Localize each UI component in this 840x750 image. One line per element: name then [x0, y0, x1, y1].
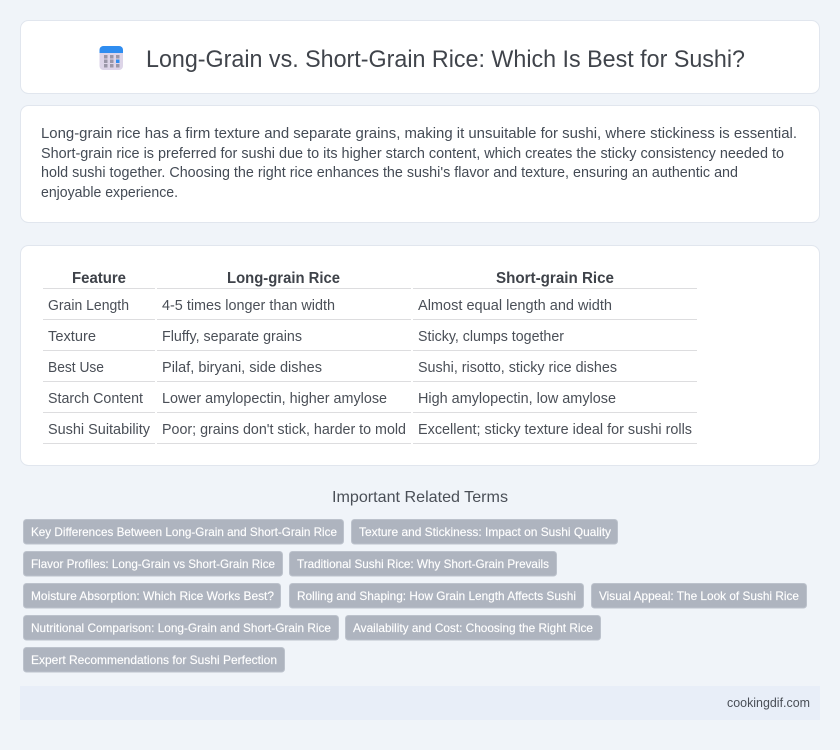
panel: intro text	[20, 106, 820, 222]
tag	[24, 616, 338, 640]
tag: Moisture Absorption: Which Rice Works Best?	[31, 589, 274, 603]
row: texture: Sticky, clumps together	[418, 329, 564, 345]
row: sushi suitability: Poor; grains don't stick, harder to mold	[162, 422, 406, 438]
row: starch content: High amylopectin, low amylose	[418, 391, 616, 407]
tag	[346, 616, 600, 640]
tag: Texture and Stickiness: Impact on Sushi Quality	[359, 525, 611, 539]
row: starch content: Lower amylopectin, higher amylose	[162, 391, 387, 407]
table header	[72, 270, 614, 287]
tag	[592, 584, 806, 608]
tag: Key Differences Between Long-Grain and Short-Grain Rice	[31, 525, 337, 539]
row: best use: Pilaf, biryani, side dishes	[162, 360, 322, 376]
tag: Availability and Cost: Choosing the Right Rice	[353, 621, 593, 635]
row: best use	[48, 360, 617, 376]
row: grain length: Almost equal length and width	[418, 298, 612, 314]
tag: Rolling and Shaping: How Grain Length Affects Sushi	[297, 589, 576, 603]
row: sushi suitability: Sushi Suitability	[48, 422, 151, 438]
tag	[290, 552, 556, 576]
tag: Expert Recommendations for Sushi Perfection	[31, 653, 277, 667]
icon: calendar	[100, 46, 123, 70]
table header: Feature	[72, 270, 126, 287]
row: best use: Sushi, risotto, sticky rice dishes	[418, 360, 617, 376]
row: texture: Fluffy, separate grains	[162, 329, 302, 345]
heading: related terms: Important Related Terms	[332, 489, 508, 506]
panel: comparison table	[20, 246, 820, 466]
tag	[24, 520, 344, 544]
row: sushi suitability	[48, 422, 692, 438]
row: texture	[48, 329, 564, 345]
tag: Visual Appeal: The Look of Sushi Rice	[599, 589, 799, 603]
tag	[290, 584, 584, 608]
tag: Traditional Sushi Rice: Why Short-Grain Prevails	[297, 557, 549, 571]
row: starch content	[48, 391, 616, 407]
footer	[20, 686, 820, 720]
row: best use: Best Use	[48, 360, 104, 376]
tag	[24, 648, 284, 672]
footer: cookingdif.com	[727, 696, 810, 710]
row: grain length	[48, 298, 612, 314]
row: sushi suitability: Excellent; sticky texture ideal for sushi rolls	[418, 422, 692, 438]
tag	[24, 552, 282, 576]
tag	[352, 520, 618, 544]
tag	[24, 584, 280, 608]
tag: Nutritional Comparison: Long-Grain and Short-Grain Rice	[31, 621, 331, 635]
panel: intro text: enjoyable experience.	[41, 185, 178, 201]
row: grain length: Grain Length	[48, 298, 129, 314]
row: texture: Texture	[48, 329, 96, 345]
panel: intro text: Long-grain rice has a firm texture and separate grains, making it unsuitable for sushi, where stickiness is essential.	[41, 126, 797, 142]
panel: header	[20, 20, 820, 94]
tag: Flavor Profiles: Long-Grain vs Short-Grain Rice	[31, 557, 275, 571]
row: starch content: Starch Content	[48, 391, 143, 407]
table header: Long-grain Rice	[227, 270, 340, 287]
panel: intro text: Short-grain rice is preferred for sushi due to its higher starch content, which creates the sticky consistency needed to	[41, 146, 784, 162]
row: grain length: 4-5 times longer than width	[162, 298, 335, 314]
panel: intro text: hold sushi together. Choosing the right rice enhances the sushi's flavor and texture, ensuring an authentic and	[41, 165, 738, 181]
title: Long-Grain vs. Short-Grain Rice: Which Is Best for Sushi?	[146, 46, 745, 73]
panel: related term tags	[24, 520, 806, 672]
table header: Short-grain Rice	[496, 270, 614, 287]
